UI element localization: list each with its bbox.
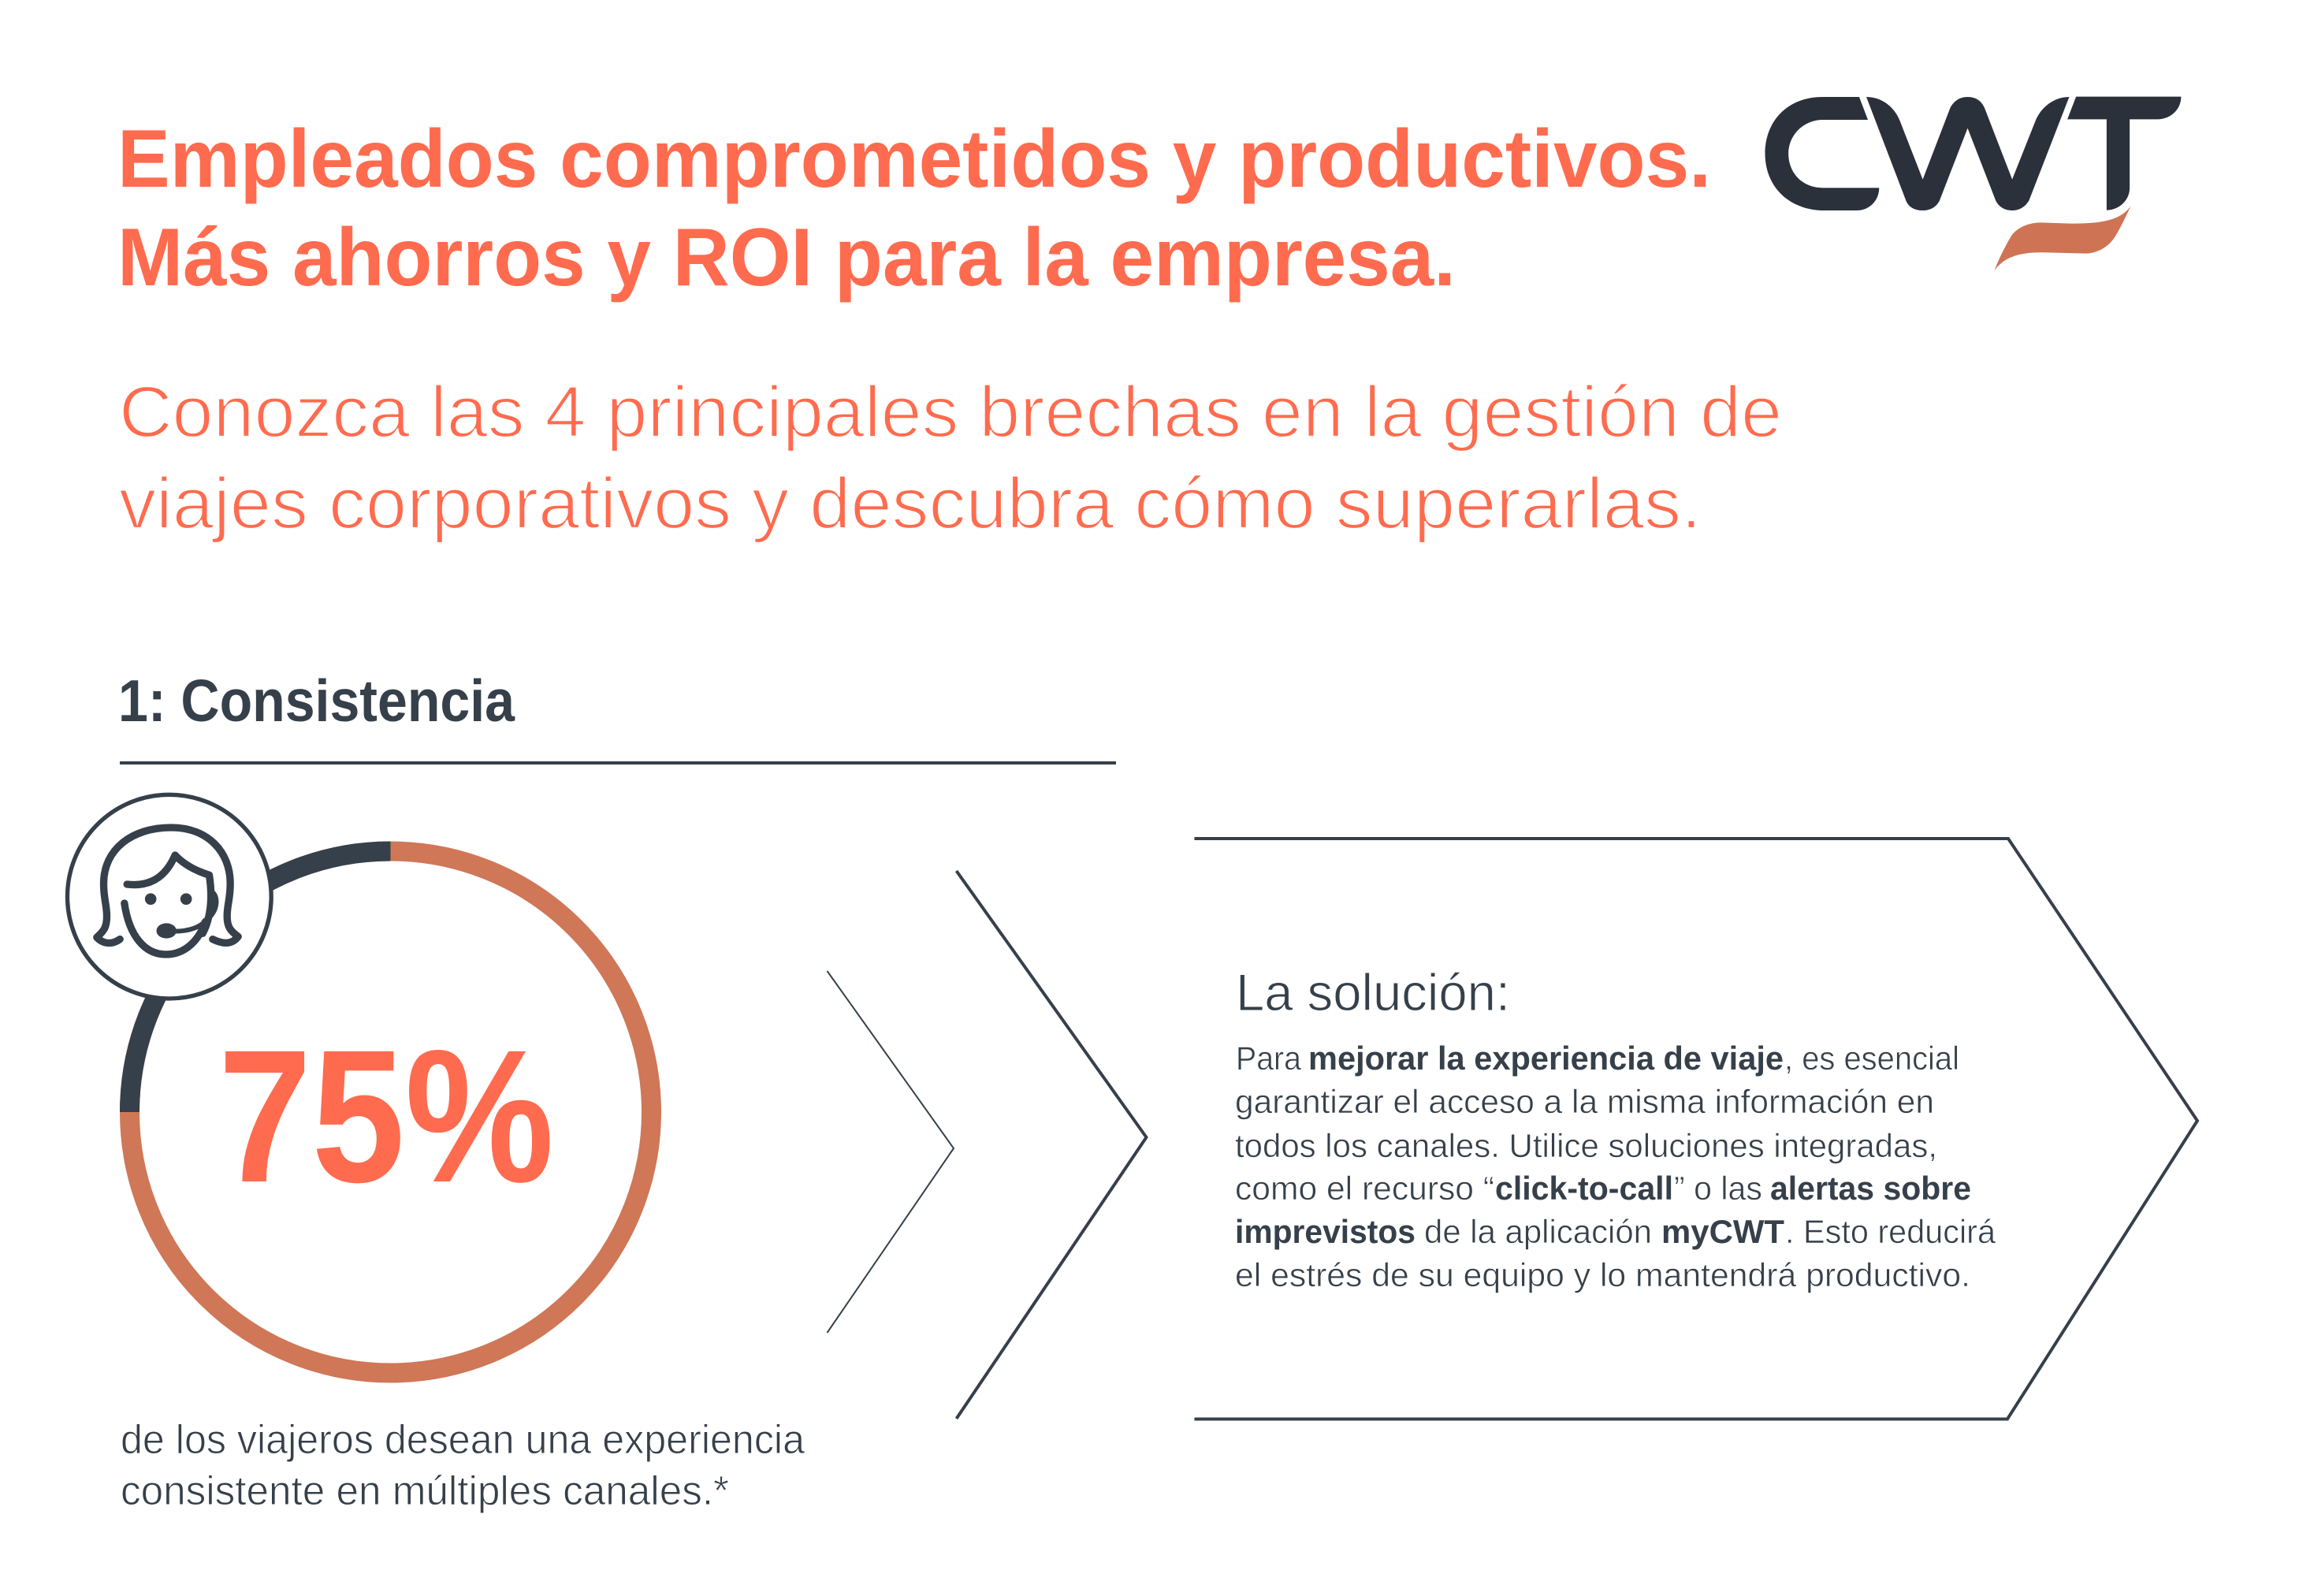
solution text: myCWT — [1661, 1213, 1784, 1250]
title: Más ahorros y ROI para la empresa. — [117, 212, 1456, 303]
solution text: . Esto reducirá — [1785, 1213, 1996, 1250]
subtitle: Conozca las 4 principales brechas en la gestión de — [119, 372, 1782, 452]
solution text: todos los canales. Utilice soluciones integradas, — [1235, 1127, 1937, 1164]
subtitle: viajes corporativos y descubra cómo superarlas. — [119, 463, 1702, 544]
logo: CWT — [1765, 97, 2181, 271]
heading: 1: Consistencia: 1: Consistencia — [118, 668, 515, 734]
solution text: Para — [1236, 1040, 1302, 1077]
solution text: garantizar el acceso a la misma información en — [1235, 1083, 1934, 1120]
solution text — [1235, 1040, 1996, 1293]
solution text: mejorar la experiencia de viaje — [1308, 1040, 1784, 1077]
caption: consistente en múltiples canales.* — [121, 1468, 729, 1514]
subtitle — [119, 372, 1782, 544]
icon: agent with headset — [67, 794, 271, 999]
panel: solution arrow outline — [1195, 839, 2197, 1419]
caption — [121, 1417, 805, 1514]
heading rule — [120, 761, 1116, 765]
solution text: , es esencial — [1784, 1040, 1959, 1077]
solution heading: La solución: — [1236, 963, 1510, 1021]
solution text: el estrés de su equipo y lo mantendrá productivo. — [1235, 1256, 1970, 1293]
stat: 75%: 75% — [218, 1010, 554, 1222]
arrow: thin chevron — [828, 971, 954, 1333]
solution text: click-to-call — [1495, 1170, 1673, 1207]
solution text: como el recurso “ — [1235, 1170, 1494, 1207]
title — [117, 113, 1711, 303]
title: Empleados comprometidos y productivos. — [117, 113, 1711, 205]
solution text: ” o las — [1674, 1170, 1762, 1207]
arrow: thick chevron — [957, 871, 1146, 1419]
solution text: de la aplicación — [1424, 1213, 1652, 1250]
caption: de los viajeros desean una experiencia — [121, 1417, 805, 1463]
solution text: imprevistos — [1235, 1213, 1415, 1250]
solution text: alertas sobre — [1770, 1170, 1971, 1207]
donut chart: 75% — [129, 851, 651, 1373]
